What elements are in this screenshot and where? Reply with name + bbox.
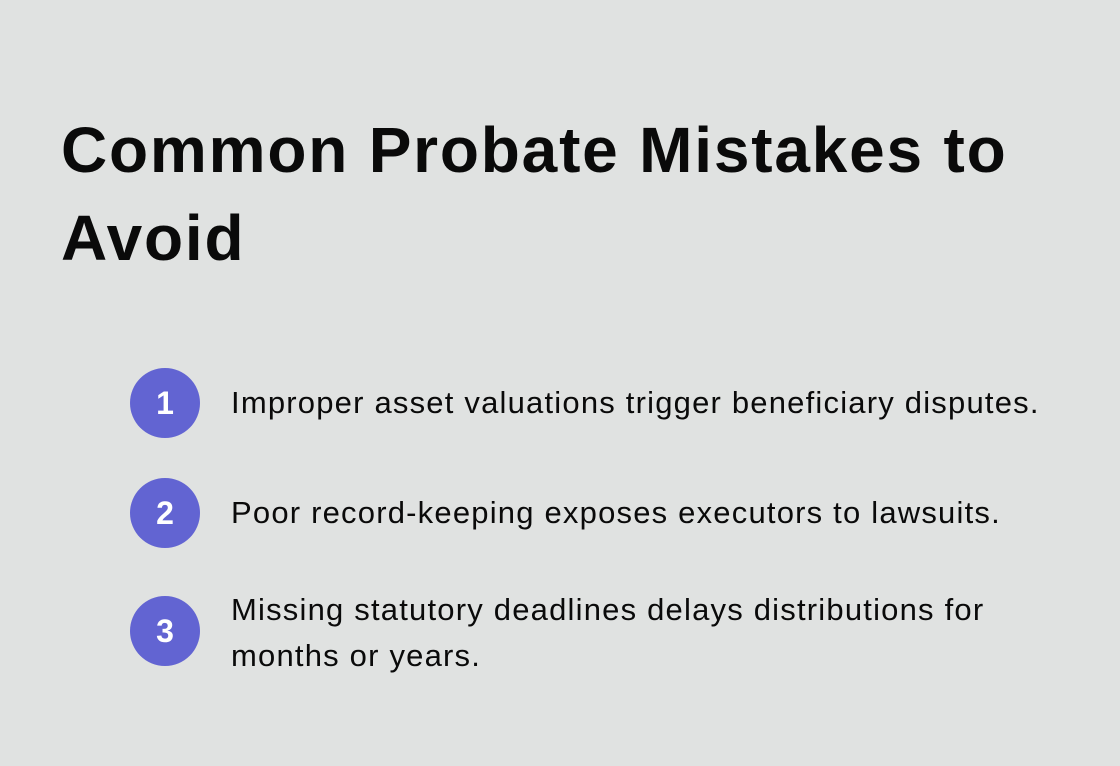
badge 3 [130, 596, 200, 666]
item 3 [130, 592, 984, 673]
badge 1: 1 [156, 385, 174, 421]
item 1 [130, 368, 1040, 438]
text 3: Missing statutory deadlines delays distributions for months or years. [231, 592, 984, 673]
badge 1 [130, 368, 200, 438]
badge 2: 2 [156, 495, 174, 531]
item 2 [130, 478, 1001, 548]
text 1: Improper asset valuations trigger beneficiary disputes. [231, 385, 1040, 420]
text 2: Poor record-keeping exposes executors to lawsuits. [231, 495, 1001, 530]
badge 3: 3 [156, 613, 174, 649]
title: Common Probate Mistakes to Avoid [61, 114, 1008, 274]
badge 2 [130, 478, 200, 548]
